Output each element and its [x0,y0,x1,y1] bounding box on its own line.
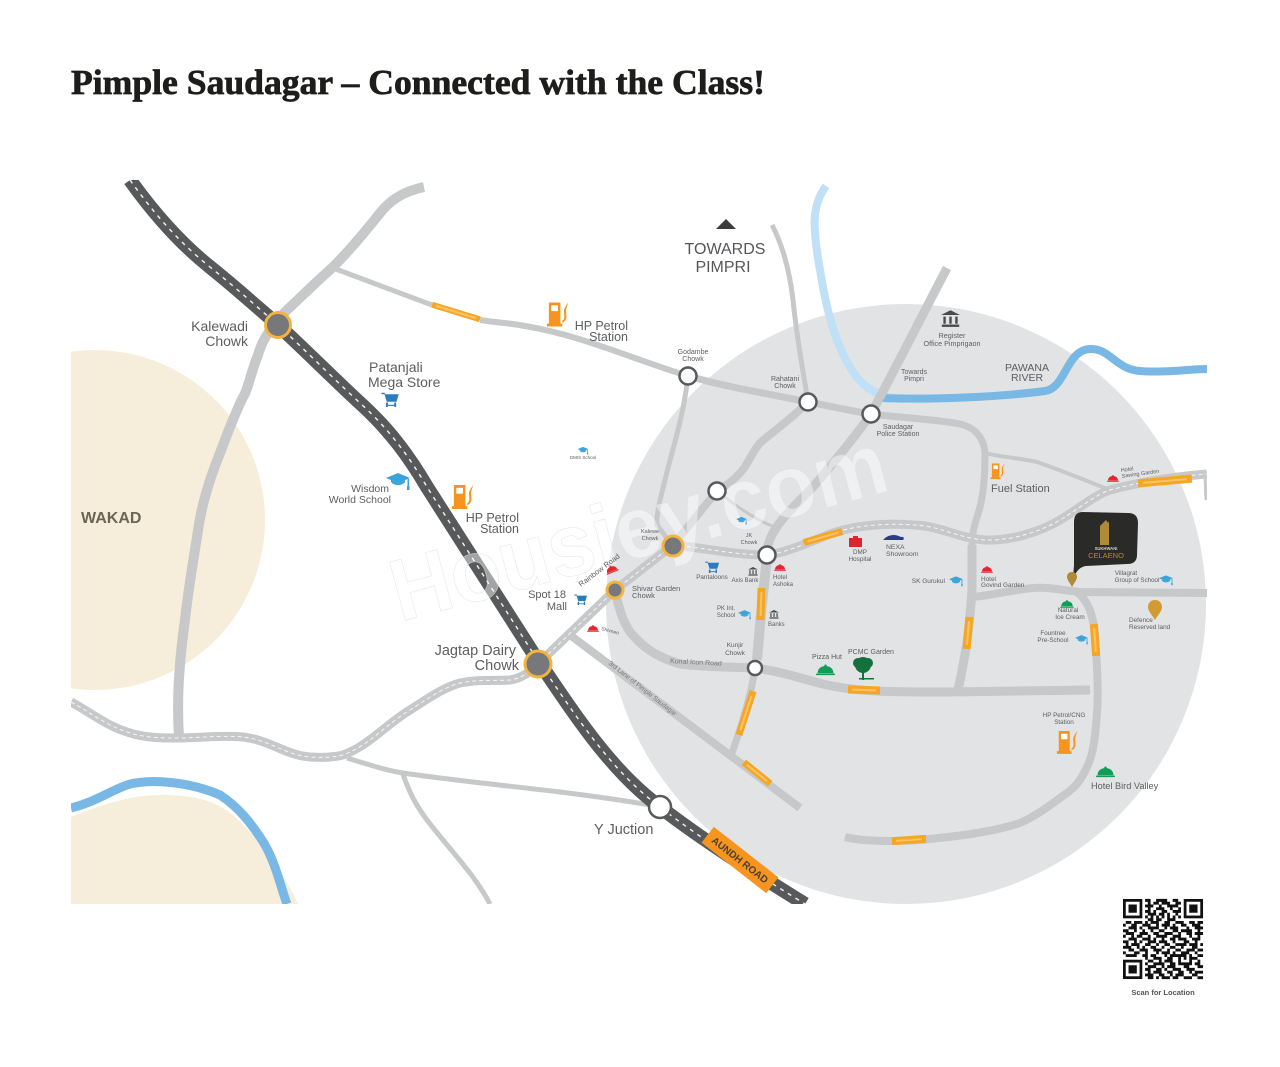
label: Wakad: WAKAD [81,510,141,527]
icon: pump 1 [547,302,568,326]
label: Kalewadi Chowk: Chowk [205,333,249,349]
label: Hotel Ashoka: Hotel [773,575,787,581]
label: Defence Reserved land: Reserved land [1129,624,1171,631]
white chowk nodes [649,368,880,818]
label: Y Junction: Y Juction [594,822,653,838]
label: HP Petrol Station: HP Petrol [466,511,519,525]
label: Natural Ice Cream: Ice Cream [1055,614,1085,621]
icon: bank Register Office [941,310,960,327]
label: PK Int School: School [717,613,735,619]
label: Spot 18 Mall: Mall [547,601,567,613]
icon: tree [853,657,874,680]
label: Saudagar Police Station: Saudagar [883,424,914,431]
label: Nexa Showroom: NEXA [886,544,905,551]
label: Fountree Pre-School: Pre-School [1037,637,1069,644]
junction nodes [266,312,683,677]
marker: Sukhwani Celaeno: SUKHWANI [1095,546,1117,551]
label: Aundh Road [702,827,778,893]
label: Towards Pimpri: TOWARDS [685,241,765,258]
area: Wakad [71,350,265,690]
label: Fountree Pre-School: Fountree [1040,630,1066,637]
road name pills [431,302,1192,845]
label: Pantaloons: Pantaloons [696,574,728,581]
icon: cart [382,393,399,407]
label: Wisdom World School: World School [329,494,391,506]
icon: Nexa car [883,535,904,540]
label: Villagrat Group of School: Group of School [1115,577,1159,584]
label: Aundh Road: AUNDH ROAD [709,835,770,886]
label: Towards Pimpri: PIMPRI [695,259,751,276]
label: HP Petrol Station top: Station [589,330,628,344]
label: Pawana River: PAWANA [1005,362,1049,374]
icon: cap Villagrat [1159,575,1173,585]
icon: red cloche [587,475,1119,632]
label: JK Chowk: Chowk [741,540,758,546]
label: Kunal Icon Road: Kunal Icon Road [670,658,722,668]
marker: Sukhwani Celaeno [1067,512,1138,587]
label: DMIS school: DMIS School [570,455,596,460]
label: Patanjali Mega Store: Patanjali [369,359,423,375]
icon: bank Axis [748,567,758,576]
label: Hotel Govind Garden: Govind Garden [981,582,1025,589]
label: Pawana River: RIVER [1011,372,1043,384]
marker: Sukhwani Celaeno: CELAENO [1088,551,1124,560]
label: Jagtap Dairy Chowk: Chowk [475,658,520,674]
label: Nexa Showroom: Showroom [886,551,919,558]
label: Register Office: Register [939,331,966,340]
label: Fuel Station: Fuel Station [991,483,1050,495]
icon: DMP hospital [849,536,862,547]
label: PCMC Garden: PCMC Garden [848,649,894,656]
river: Pawana [815,186,1207,399]
area: bottom left land [71,795,298,904]
label: PK Int School: PK Int. [717,606,735,612]
icon: cap Wisdom [386,473,410,490]
label: Kunji Chowk: Kunjir [727,642,744,649]
icon: cart Pantaloons [705,562,719,573]
label: DMP Hospital: Hospital [849,556,871,563]
label: HP Petrol CNG Station: Station [1054,719,1074,726]
label: Rahatani Chowk: Chowk [774,383,796,390]
label: Saudagar Police Station: Police Station [877,431,920,438]
label: Towards Pimpri small: Towards [901,369,928,376]
QR code [1123,900,1203,978]
label: Shivar Garden: Chowk [632,591,655,600]
label: Spot 18 Mall: Spot 18 [528,589,566,601]
label: Rahatani Chowk: Rahatani [771,376,799,383]
icon: small cap [578,447,588,455]
roads: secondary network [178,187,1207,904]
icon: green cloche Ice Cream [1060,600,1074,608]
label: Shivneri: Shivneri [600,626,619,637]
label: SK Gurukul: SK Gurukul [912,578,946,585]
icon: cap SK [949,576,963,586]
label: DMP Hospital: DMP [853,549,867,556]
label: Hotel Sawing Garden: Sawing Garden [1121,469,1160,480]
label: Banks: Banks [768,622,785,628]
QR data modules [1123,900,1203,978]
label: Natural Ice Cream: Natural [1058,607,1078,614]
label: HP Petrol CNG Station: HP Petrol/CNG [1043,712,1085,719]
label: Shivar Garden: Shivar Garden [632,584,680,593]
label: Towards Pimpri small: Pimpri [904,376,924,383]
icon: Towards arrow [716,219,736,229]
label: Hotel Govind Garden: Hotel [981,576,996,583]
icon: defence pin [1148,600,1162,620]
icon: Hotel Bird Valley cloche [1096,766,1115,777]
label: Register Office: Office Pimprigaon [924,339,980,348]
label: Kunji Chowk: Chowk [725,650,746,657]
highway: Aundh Road [130,180,805,904]
label: Jagtap Dairy Chowk: Jagtap Dairy [435,643,517,659]
label: Defence Reserved land: Defence [1129,617,1153,624]
roads: dashed connectors [71,474,1207,757]
label: Godambe Chowk: Chowk [682,356,704,363]
label: Scan for Location: Scan for Location [1131,988,1195,997]
label: Villagrat Group of School: Villagrat [1115,570,1137,577]
icon: cart Spot 18 [574,595,587,605]
label: Hotel Bird Valley: Hotel Bird Valley [1091,781,1159,791]
label: Wisdom World School: Wisdom [351,483,389,495]
icon: pump 2 [452,485,473,509]
icon: cap JK [736,517,747,525]
watermark: Housiey.com [379,413,898,640]
label: Axis Bank: Axis Bank [732,578,759,584]
icon: Pizza Hut cloche [816,664,835,675]
title: Pimple Saudagar – Connected with the Class! [71,63,765,102]
icon: bank Banks [769,610,779,619]
icon: cap Fountree [1075,635,1088,644]
label: Pizza Hut: Pizza Hut [812,654,842,661]
label: Kalewadi Chowk: Kalewadi [191,318,248,334]
label: Rainbow road: Rainbow Road [577,552,621,589]
label: HP Petrol Station: Station [480,522,519,536]
label: Hotel Sawing Garden: Hotel [1120,466,1134,474]
panel: location map [0,180,1207,904]
area: Pimple Saudagar circle [606,304,1206,904]
label: Hotel Ashoka: Ashoka [773,582,794,588]
label: Godambe Chowk: Godambe [678,349,708,356]
river: bottom left [71,782,287,904]
label: Patanjali Mega Store: Mega Store [368,374,441,390]
icon: cap PK [738,610,751,619]
icon: fuel station [991,464,1004,479]
QR finder patterns [1124,900,1202,978]
label: JK Chowk: JK [746,533,753,539]
label: HP Petrol Station top: HP Petrol [575,319,628,333]
label: Kunal: Kalewe [641,529,659,535]
label: 3rd Lane: 3rd Lane of Pimple Saudagar [607,660,678,718]
icon: pump CNG [1057,731,1077,754]
label: Kunal: Chowk [642,536,659,542]
